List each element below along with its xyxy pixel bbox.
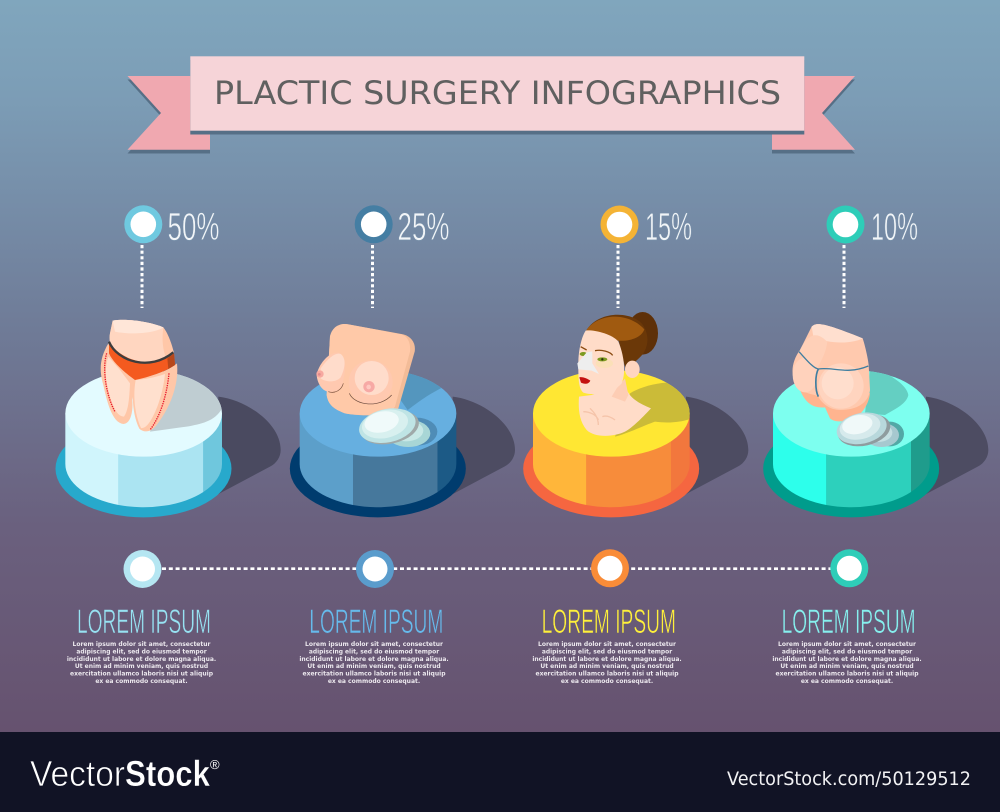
timeline marker 4 (830, 549, 868, 587)
body text 4 (772, 641, 922, 685)
percent marker 25% (355, 205, 450, 308)
body text 1: incididunt ut labore et dolore magna aliqua. (67, 656, 216, 663)
body text 2: Lorem ipsum dolor sit amet, consectetur (305, 641, 444, 648)
timeline marker 2 (356, 550, 394, 588)
body text 2: incididunt ut labore et dolore magna aliqua. (299, 656, 449, 663)
timeline marker 1 (124, 550, 162, 588)
column 2: breast (290, 205, 515, 685)
percent marker 25%: 25% (398, 206, 450, 249)
pedestal (523, 370, 748, 517)
body text 1 (67, 641, 216, 685)
body text 2: adipiscing elit, sed do eiusmod tempor (309, 648, 440, 656)
body text 3: incididunt ut labore et dolore magna aliqua. (532, 656, 682, 663)
footer logo: Vector (30, 753, 125, 794)
figure: buttocks with thong (792, 324, 870, 421)
body text 4: adipiscing elit, sed do eiusmod tempor (782, 648, 913, 656)
heading 2: LOREM IPSUM (309, 603, 443, 641)
body text 2: Ut enim ad minim veniam, quis nostrud (307, 663, 441, 670)
percent marker 15%: 15% (645, 206, 692, 249)
pedestal and woman figure (523, 312, 748, 517)
pedestal and breast figure (290, 324, 515, 517)
percent marker 10% (826, 206, 918, 308)
figure: thighs with surgical lines (101, 320, 177, 431)
heading 1: LOREM IPSUM (77, 603, 211, 641)
column 4: buttocks (763, 206, 988, 685)
pedestal and thighs figure (55, 320, 281, 517)
body text 4: exercitation ullamco laboris nisi ut aliquip (776, 670, 919, 678)
footer bar (0, 732, 1000, 812)
footer logo: Stock (125, 753, 211, 794)
body text 3 (532, 641, 682, 685)
connector line between timeline markers (162, 567, 832, 570)
body text 3: ex ea commodo consequat. (561, 678, 653, 685)
ribbon tail left (128, 76, 210, 154)
body text 1: exercitation ullamco laboris nisi ut aliquip (70, 670, 214, 678)
footer url: VectorStock.com/50129512 (727, 768, 971, 790)
body text 3: adipiscing elit, sed do eiusmod tempor (542, 648, 673, 656)
percent marker 15% (600, 206, 692, 308)
body text 2 (299, 641, 449, 685)
title banner (128, 56, 855, 153)
pedestal and buttocks figure (763, 324, 988, 517)
pedestal (290, 367, 515, 517)
column 1: liposuction (55, 205, 281, 685)
figure: breasts (316, 324, 415, 415)
body text 3: Lorem ipsum dolor sit amet, consectetur (538, 641, 677, 648)
body text 4: ex ea commodo consequat. (801, 678, 893, 685)
percent marker 10%: 10% (871, 206, 918, 249)
body text 3: exercitation ullamco laboris nisi ut aliquip (536, 670, 679, 678)
body text 3: Ut enim ad minim veniam, quis nostrud (540, 663, 674, 670)
body text 4: Ut enim ad minim veniam, quis nostrud (780, 663, 914, 670)
icon: silicone implants (356, 403, 437, 449)
column 3: nose (523, 206, 748, 685)
title text: PLACTIC SURGERY INFOGRAPHICS (214, 74, 781, 112)
timeline marker 3 (591, 549, 629, 587)
body text 2: exercitation ullamco laboris nisi ut aliquip (302, 670, 446, 678)
footer logo: ® (210, 757, 220, 772)
pedestal (55, 367, 281, 517)
pedestal (763, 368, 988, 517)
heading 3: LOREM IPSUM (542, 603, 676, 641)
body text 1: adipiscing elit, sed do eiusmod tempor (76, 648, 208, 656)
percent marker 50%: 50% (168, 206, 220, 249)
icon: silicone implants (834, 408, 904, 451)
figure: woman with nose bandage (577, 312, 658, 436)
body text 4: Lorem ipsum dolor sit amet, consectetur (778, 641, 917, 648)
percent marker 50% (124, 205, 220, 308)
body text 1: Ut enim ad minim veniam, quis nostrud (75, 663, 208, 670)
body text 2: ex ea commodo consequat. (328, 678, 420, 685)
ribbon tail right (772, 76, 855, 154)
ribbon main (190, 56, 804, 134)
body text 1: ex ea commodo consequat. (95, 678, 188, 685)
footer logo (30, 753, 220, 794)
body text 1: Lorem ipsum dolor sit amet, consectetur (72, 641, 211, 648)
body text 4: incididunt ut labore et dolore magna aliqua. (772, 656, 922, 663)
